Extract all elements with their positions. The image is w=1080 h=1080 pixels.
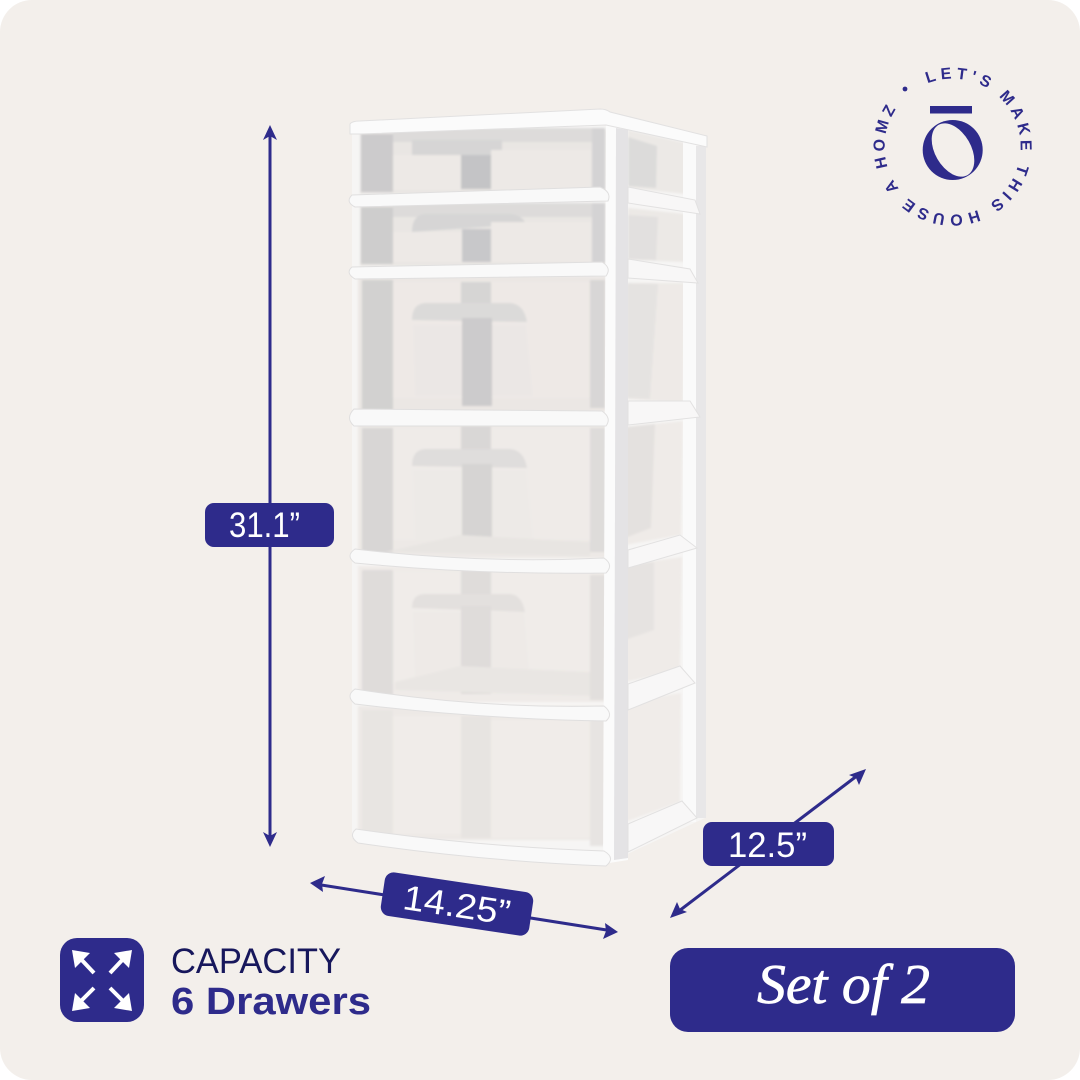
height arrow line xyxy=(263,125,277,847)
front corner post xyxy=(603,118,706,864)
depth arrow line xyxy=(670,769,866,918)
side rims xyxy=(628,187,700,852)
width label 14.25 xyxy=(380,871,534,937)
drawer 6 window xyxy=(358,706,606,846)
depth arrow with label xyxy=(670,769,866,918)
brand badge xyxy=(873,68,1032,226)
badge logo letter xyxy=(923,106,983,184)
drawer 5 window xyxy=(358,566,606,702)
set of 2 banner: Set of 2 xyxy=(757,954,930,1016)
icon: expand arrows xyxy=(60,938,144,1022)
depth label 12.5: 12.5” xyxy=(728,826,807,865)
depth label 12.5 xyxy=(703,822,834,866)
top lid xyxy=(350,109,707,147)
drawer 1 window xyxy=(360,128,606,194)
drawer 3 window xyxy=(358,276,606,412)
width label 14.25: 14.25” xyxy=(400,878,513,933)
drawer 4 window xyxy=(358,424,606,558)
side drawer windows xyxy=(625,130,686,822)
capacity label: CAPACITY xyxy=(171,942,341,981)
tower body xyxy=(352,114,705,862)
drawer 2 window xyxy=(360,203,606,266)
front drawer rims xyxy=(349,187,611,866)
capacity feature xyxy=(60,938,371,1023)
height arrow with label xyxy=(205,125,334,847)
drawer windows xyxy=(358,128,686,846)
height label 31.1: 31.1” xyxy=(229,506,300,545)
badge curved slogan: LET'S MAKE THIS HOUSE A HOMZ xyxy=(873,68,1032,226)
width arrow with label xyxy=(310,871,618,939)
set of 2 banner xyxy=(670,948,1015,1032)
width arrow line xyxy=(310,876,618,939)
capacity value: 6 Drawers xyxy=(171,981,371,1023)
product: six drawer storage tower xyxy=(349,109,707,866)
height label 31.1 xyxy=(205,503,334,547)
